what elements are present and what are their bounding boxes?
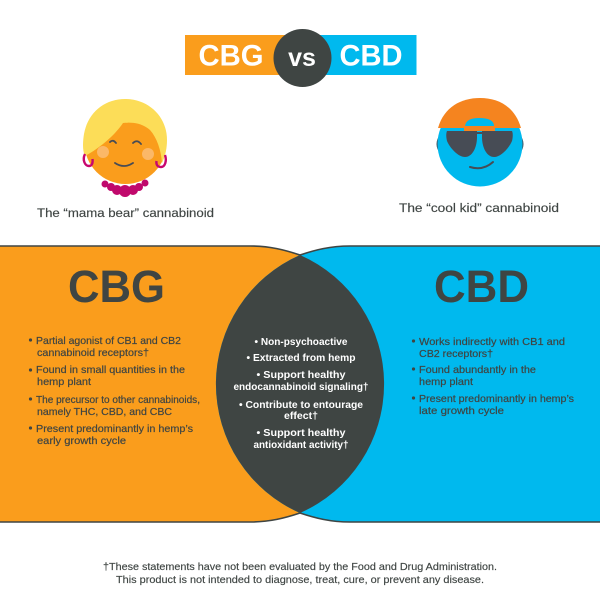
icon: mama bear face xyxy=(83,99,167,197)
shared list xyxy=(234,337,368,451)
shared list: • Support healthy xyxy=(256,428,346,439)
panel: CBD venn circle xyxy=(216,246,600,522)
shared list: • Non-psychoactive xyxy=(254,337,348,348)
CBD list: Found abundantly in the xyxy=(419,365,536,376)
footnote: †These statements have not been evaluated by the Food and Drug Administration. xyxy=(103,562,497,573)
CBD list xyxy=(412,337,574,417)
shared list: endocannabinoid signaling† xyxy=(234,382,368,393)
heading: CBD: CBD xyxy=(434,261,529,312)
panel: shared overlap xyxy=(216,255,384,513)
CBD list: late growth cycle xyxy=(419,406,504,417)
CBG list: Found in small quantities in the xyxy=(36,365,185,376)
CBD list: CB2 receptors† xyxy=(419,349,493,360)
CBD list: Present predominantly in hemp’s xyxy=(419,394,574,405)
shared list: effect† xyxy=(284,411,318,422)
shared list: antioxidant activity† xyxy=(254,440,348,451)
icon: cool kid face xyxy=(436,98,524,186)
panel: CBG venn circle xyxy=(0,246,384,522)
shared list: • Extracted from hemp xyxy=(246,353,356,364)
title banner: CBG xyxy=(198,40,264,72)
shared list: • Contribute to entourage xyxy=(239,400,364,411)
mama bear caption: The “mama bear” cannabinoid xyxy=(37,206,214,220)
title banner: vs xyxy=(288,44,316,72)
CBG list: Present predominantly in hemp’s xyxy=(36,424,193,435)
shared list: • Support healthy xyxy=(256,370,346,381)
CBG list: hemp plant xyxy=(37,377,91,388)
heading: CBG: CBG xyxy=(68,261,165,312)
CBG list: The precursor to other cannabinoids, xyxy=(36,395,200,406)
CBD list: Works indirectly with CB1 and xyxy=(419,337,565,348)
footnote xyxy=(103,562,497,586)
footnote: This product is not intended to diagnose, treat, cure, or prevent any disease. xyxy=(116,575,484,586)
CBG list: early growth cycle xyxy=(37,436,126,447)
CBG list: namely THC, CBD, and CBC xyxy=(37,407,172,418)
title banner: CBD xyxy=(340,40,402,72)
CBG list: cannabinoid receptors† xyxy=(37,348,149,359)
CBG list: Partial agonist of CB1 and CB2 xyxy=(36,336,181,347)
title banner xyxy=(185,29,416,87)
CBD list: hemp plant xyxy=(419,377,473,388)
CBG list xyxy=(29,336,200,447)
cool kid caption: The “cool kid” cannabinoid xyxy=(399,201,559,215)
